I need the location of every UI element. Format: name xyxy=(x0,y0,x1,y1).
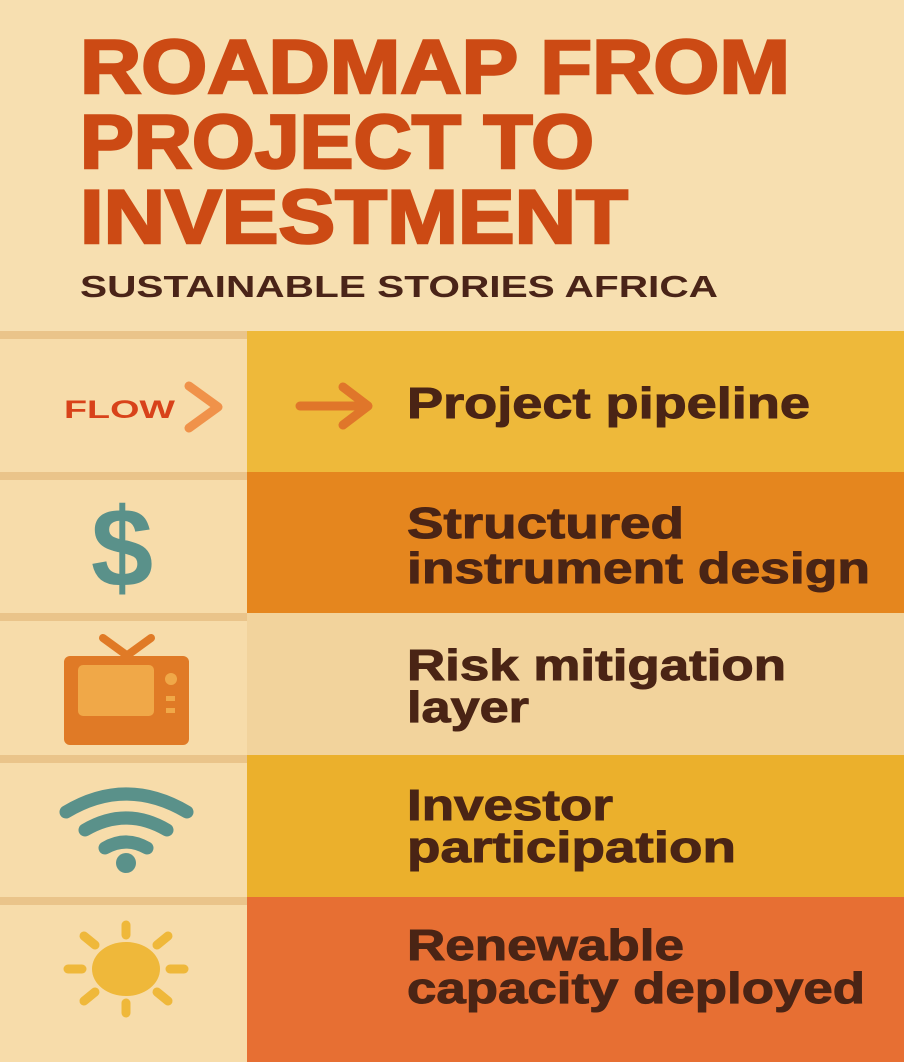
row 2: structured instrument design xyxy=(91,472,904,613)
row 5: renewable capacity deployed: capacity deployed xyxy=(407,964,865,1013)
icon: flow label: FLOW xyxy=(64,396,176,424)
row 1: project pipeline: Project pipeline xyxy=(407,379,810,428)
title: ROADMAP FROM xyxy=(80,25,790,110)
icon: flow label xyxy=(64,386,218,428)
arrow xyxy=(300,387,368,425)
icon: sun xyxy=(68,925,184,1013)
row 5: renewable capacity deployed: Renewable xyxy=(407,921,684,970)
row 3: risk mitigation layer: Risk mitigation xyxy=(407,641,786,690)
row 1: project pipeline xyxy=(64,331,904,472)
title: PROJECT TO xyxy=(80,100,594,185)
row 4: investor participation: participation xyxy=(407,823,736,872)
subtitle: SUSTAINABLE STORIES AFRICA xyxy=(80,269,718,304)
icon: tv xyxy=(64,638,189,745)
row 2: structured instrument design: instrument design xyxy=(407,544,870,593)
title xyxy=(80,25,790,260)
title: INVESTMENT xyxy=(80,175,628,260)
left cells xyxy=(0,339,247,1062)
row 4: investor participation: Investor xyxy=(407,781,613,830)
row 3: risk mitigation layer: layer xyxy=(407,683,529,732)
row 2: structured instrument design: Structured xyxy=(407,499,684,548)
icon: wifi xyxy=(66,794,187,848)
icon: dollar: $ xyxy=(91,485,153,610)
dividers xyxy=(0,331,247,905)
row 4: investor participation xyxy=(66,755,904,897)
row 5: renewable capacity deployed xyxy=(68,897,904,1062)
row 3: risk mitigation layer xyxy=(64,613,904,755)
